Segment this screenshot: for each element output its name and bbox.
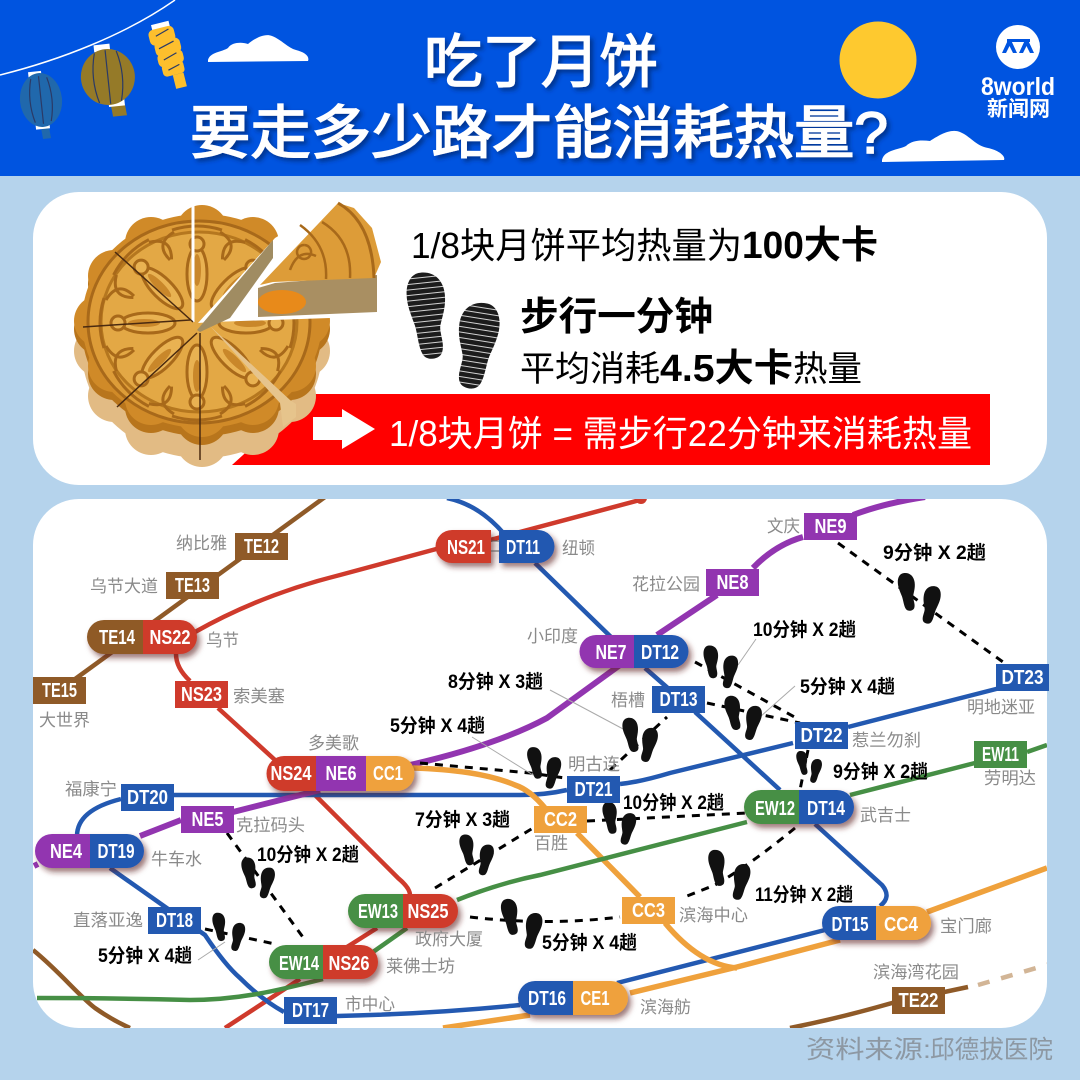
blue line bbox=[77, 498, 1000, 1016]
single station boxes: TE22 bbox=[898, 990, 938, 1012]
single station boxes: NE8 bbox=[716, 572, 748, 594]
interchange pill: EW13 NS25: EW13 bbox=[358, 901, 398, 923]
icon: yellow lantern bbox=[146, 19, 191, 92]
interchange pill: DT15 CC4 bbox=[822, 906, 931, 940]
brown line bbox=[33, 497, 968, 1028]
footprints on routes bbox=[211, 572, 942, 952]
station names: 克拉码头 bbox=[236, 816, 305, 835]
interchange pill: NE7 DT12 bbox=[580, 635, 688, 668]
walking time labels bbox=[98, 542, 986, 967]
red result banner bbox=[232, 394, 990, 465]
walking route dashes bbox=[205, 543, 1003, 944]
icon: cloud right bbox=[882, 131, 1004, 162]
interchange pill: NS24 NE6 CC1 bbox=[266, 756, 414, 791]
single station boxes: DT20 bbox=[127, 787, 168, 809]
walking time labels: 10分钟 X 2趟 bbox=[623, 792, 724, 814]
station names bbox=[39, 517, 1036, 1017]
walking calories: 平均消耗 bbox=[520, 350, 660, 389]
icon: footprints bbox=[404, 270, 503, 392]
single station boxes: CC3 bbox=[632, 900, 665, 922]
walking time labels: 10分钟 X 2趟 bbox=[753, 619, 856, 641]
single station boxes: TE13 bbox=[175, 575, 210, 597]
station names: 小印度 bbox=[527, 627, 578, 646]
station names: 武吉士 bbox=[860, 806, 911, 825]
interchange pill: EW14 NS26 bbox=[269, 945, 378, 979]
station names: 纳比雅 bbox=[176, 534, 227, 553]
station names: 滨海中心 bbox=[679, 906, 748, 925]
interchange pill: NS24 NE6 CC1: CC1 bbox=[373, 763, 403, 785]
station names: 多美歌 bbox=[308, 734, 359, 753]
walking time labels: 5分钟 X 4趟 bbox=[390, 715, 485, 737]
station names: 滨海湾花园 bbox=[873, 963, 959, 982]
station names: 直落亚逸 bbox=[73, 911, 143, 930]
single station boxes bbox=[33, 513, 1049, 1024]
orange line bbox=[413, 768, 1047, 1028]
station names: 市中心 bbox=[345, 995, 395, 1014]
interchange pill: DT16 CE1: DT16 bbox=[528, 988, 566, 1010]
single station boxes: NS23 bbox=[181, 684, 222, 706]
interchange pill: NE7 DT12: NE7 bbox=[596, 642, 626, 664]
interchange pill: DT16 CE1 bbox=[518, 981, 628, 1015]
interchange pill: NE4 DT19: NE4 bbox=[50, 841, 83, 863]
station names: 索美塞 bbox=[233, 687, 285, 706]
walking heading: 步行一分钟 bbox=[520, 296, 713, 339]
title bbox=[190, 30, 888, 166]
station names: 宝门廊 bbox=[940, 917, 992, 936]
single station boxes: EW11 bbox=[982, 744, 1019, 766]
station names: 福康宁 bbox=[65, 780, 117, 799]
station names: 纽顿 bbox=[562, 539, 595, 558]
interchange pill: NS24 NE6 CC1: NS24 bbox=[270, 763, 312, 785]
green line bbox=[37, 745, 1047, 1000]
interchange pill: NE7 DT12: DT12 bbox=[641, 642, 679, 664]
mooncake bbox=[74, 196, 395, 467]
source credit bbox=[806, 1036, 1053, 1064]
walking time labels: 9分钟 X 2趟 bbox=[833, 761, 928, 783]
walking time labels: 5分钟 X 4趟 bbox=[98, 945, 192, 967]
interchange pill: TE14 NS22: TE14 bbox=[99, 627, 136, 649]
walking calories bbox=[520, 348, 862, 390]
station names: 明古连 bbox=[568, 755, 620, 774]
interchange pill: EW14 NS26: EW14 bbox=[279, 953, 320, 975]
calorie line: 1/8块月饼平均热量为 bbox=[411, 225, 742, 266]
station names: 乌节 bbox=[206, 631, 239, 650]
interchange pill: EW14 NS26: NS26 bbox=[328, 953, 370, 975]
single station boxes: NE9 bbox=[814, 516, 846, 538]
icon: arrow bbox=[313, 409, 375, 449]
walking time labels: 7分钟 X 3趟 bbox=[415, 809, 510, 831]
station names: 百胜 bbox=[534, 834, 568, 853]
panel: calorie facts bbox=[33, 192, 1047, 485]
single station boxes: DT17 bbox=[292, 1000, 329, 1022]
station names: 明地迷亚 bbox=[967, 698, 1035, 717]
station names: 劳明达 bbox=[984, 769, 1036, 788]
title: 吃了月饼 bbox=[424, 30, 658, 95]
single station boxes: TE12 bbox=[244, 536, 279, 558]
icon: blue lantern bbox=[17, 69, 66, 141]
station names: 惹兰勿刹 bbox=[852, 731, 921, 750]
calorie line: 100大卡 bbox=[742, 225, 878, 267]
interchange pill: TE14 NS22: NS22 bbox=[150, 627, 190, 649]
interchange pill: NS21 DT11: NS21 bbox=[447, 537, 485, 559]
single station boxes: CC2 bbox=[544, 809, 577, 831]
panel: MRT map bbox=[33, 492, 1050, 1028]
station names: 花拉公园 bbox=[632, 575, 700, 594]
icon: olive lantern bbox=[78, 41, 139, 120]
banner text: 1/8块月饼 = 需步行22分钟来消耗热量 bbox=[389, 413, 972, 454]
walking calories: 4.5大卡 bbox=[660, 348, 793, 390]
logo bbox=[981, 25, 1055, 121]
station names: 梧槽 bbox=[611, 691, 645, 710]
station names: 文庆 bbox=[767, 517, 800, 536]
logo: 新闻网 bbox=[987, 97, 1050, 121]
interchange pill: DT15 CC4: DT15 bbox=[832, 914, 868, 936]
interchange pill: EW12 DT14: DT14 bbox=[807, 798, 846, 820]
icon: cloud left bbox=[208, 35, 308, 62]
logo: 8world bbox=[981, 73, 1055, 101]
station names: 滨海舫 bbox=[640, 998, 691, 1017]
single station boxes: TE15 bbox=[42, 680, 77, 702]
interchange pill: NS24 NE6 CC1: NE6 bbox=[326, 763, 356, 785]
interchange pill: EW12 DT14 bbox=[744, 790, 854, 824]
rail lines bbox=[33, 492, 1050, 1028]
interchange pill: TE14 NS22 bbox=[87, 620, 197, 654]
title: 要走多少路才能消耗热量? bbox=[190, 101, 888, 166]
detached slice bbox=[258, 203, 381, 317]
single station boxes: DT21 bbox=[574, 779, 612, 801]
walking time labels: 9分钟 X 2趟 bbox=[883, 542, 986, 564]
interchange pill: EW12 DT14: EW12 bbox=[755, 798, 795, 820]
walking time labels: 5分钟 X 4趟 bbox=[542, 932, 637, 954]
walking time labels: 5分钟 X 4趟 bbox=[800, 676, 895, 698]
leader lines bbox=[198, 639, 795, 960]
interchange pill: NS21 DT11 bbox=[436, 530, 554, 563]
single station boxes: NE5 bbox=[192, 809, 224, 831]
station names: 大世界 bbox=[39, 711, 90, 730]
lantern string bbox=[0, 0, 175, 75]
station names: 政府大厦 bbox=[415, 930, 483, 949]
single station boxes: DT23 bbox=[1002, 667, 1044, 689]
interchange pill: DT16 CE1: CE1 bbox=[580, 988, 610, 1010]
header band bbox=[0, 0, 1080, 176]
station names: 莱佛士坊 bbox=[386, 957, 455, 976]
source credit: 资料来源: bbox=[806, 1036, 931, 1064]
interchange pill: DT15 CC4: CC4 bbox=[884, 914, 919, 936]
interchange pill: EW13 NS25 bbox=[348, 894, 458, 928]
interchange pill: NS21 DT11: DT11 bbox=[506, 537, 540, 559]
station names: 牛车水 bbox=[151, 850, 202, 869]
single station boxes: DT22 bbox=[800, 725, 842, 747]
walking calories: 热量 bbox=[793, 350, 862, 389]
interchange pill: NE4 DT19: DT19 bbox=[98, 841, 134, 863]
purple line bbox=[34, 497, 925, 866]
walking time labels: 8分钟 X 3趟 bbox=[448, 671, 543, 693]
source credit: 邱德拔医院 bbox=[930, 1036, 1053, 1064]
icon: moon bbox=[840, 22, 916, 98]
interchange pill: NE4 DT19 bbox=[35, 834, 144, 868]
walking time labels: 11分钟 X 2趟 bbox=[755, 884, 853, 906]
interchange pill: EW13 NS25: NS25 bbox=[408, 901, 448, 923]
station names: 乌节大道 bbox=[90, 577, 158, 596]
red line bbox=[176, 500, 640, 1028]
single station boxes: DT13 bbox=[660, 689, 698, 711]
single station boxes: DT18 bbox=[156, 910, 193, 932]
walking time labels: 10分钟 X 2趟 bbox=[257, 844, 359, 866]
